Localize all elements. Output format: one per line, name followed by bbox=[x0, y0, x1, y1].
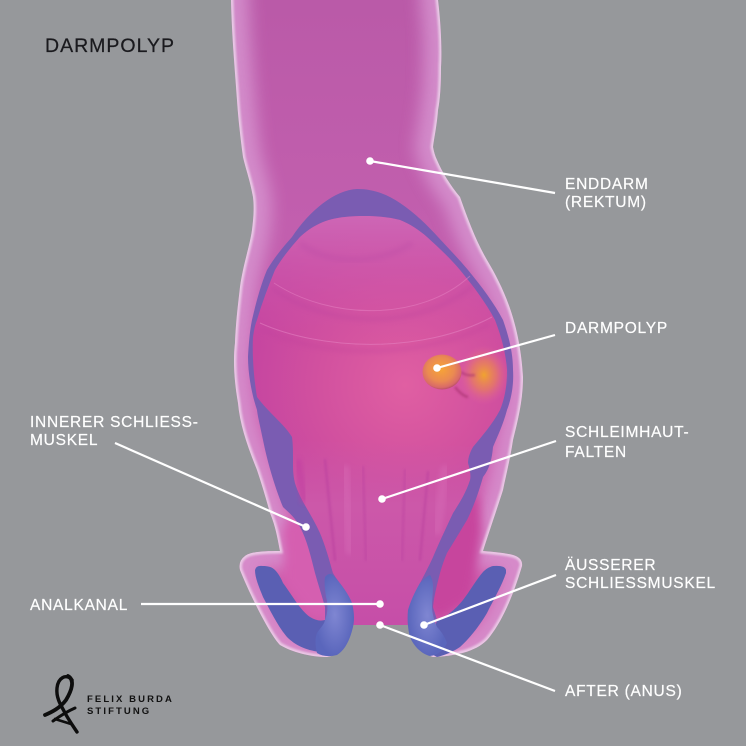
logo: Felix Burda Stiftung: STIFTUNG bbox=[87, 706, 151, 717]
concentric rectal folds bbox=[260, 243, 492, 351]
callout: After: AFTER (ANUS) bbox=[565, 683, 682, 700]
polyp bbox=[422, 354, 462, 390]
polyp stalk creases bbox=[455, 372, 475, 397]
callout: Äusserer Schliessmuskel bbox=[420, 557, 716, 629]
polyp glow bbox=[459, 345, 509, 405]
callout: After bbox=[376, 621, 682, 700]
callout: Darmpolyp bbox=[433, 320, 668, 372]
internal sphincter bulb right bbox=[408, 575, 447, 656]
outer bowel body bbox=[231, 0, 523, 657]
callout: Innerer Schliessmuskel: MUSKEL bbox=[30, 432, 98, 449]
callout: Schleimhautfalten bbox=[378, 424, 689, 503]
callout: Enddarm: (REKTUM) bbox=[565, 194, 647, 211]
callout: Analkanal: ANALKANAL bbox=[30, 597, 128, 614]
external sphincter left bbox=[255, 566, 332, 652]
lumen top tone bbox=[253, 216, 500, 345]
internal sphincter bulb left bbox=[316, 574, 354, 656]
callout: Analkanal bbox=[30, 597, 384, 614]
callout: Darmpolyp: DARMPOLYP bbox=[565, 320, 668, 337]
mucosal folds bbox=[298, 460, 445, 560]
callout: Schleimhautfalten: FALTEN bbox=[565, 444, 627, 461]
lumen interior bbox=[253, 216, 507, 625]
logo: Felix Burda Stiftung: FELIX BURDA bbox=[87, 694, 174, 705]
callout: Innerer Schliessmuskel bbox=[30, 414, 310, 531]
logo ribbon icon bbox=[45, 676, 77, 732]
callout: Enddarm: ENDDARM bbox=[565, 176, 649, 193]
external sphincter right bbox=[428, 566, 506, 657]
callout: Äusserer Schliessmuskel: ÄUSSERER bbox=[565, 557, 656, 574]
lower canal tone bbox=[293, 440, 473, 625]
callout: Äusserer Schliessmuskel: SCHLIESSMUSKEL bbox=[565, 575, 716, 592]
soft rim highlights bbox=[231, 0, 523, 657]
purple muscle wall bbox=[248, 189, 513, 620]
logo: Felix Burda Stiftung bbox=[45, 676, 174, 732]
callout: Innerer Schliessmuskel: INNERER SCHLIESS- bbox=[30, 414, 199, 431]
callout: Enddarm bbox=[366, 157, 649, 211]
callout: Schleimhautfalten: SCHLEIMHAUT- bbox=[565, 424, 689, 441]
colon anatomy illustration bbox=[231, 0, 523, 657]
right pink pocket bbox=[433, 494, 487, 618]
left pink pocket bbox=[280, 517, 324, 610]
title: DARMPOLYP bbox=[45, 35, 175, 57]
